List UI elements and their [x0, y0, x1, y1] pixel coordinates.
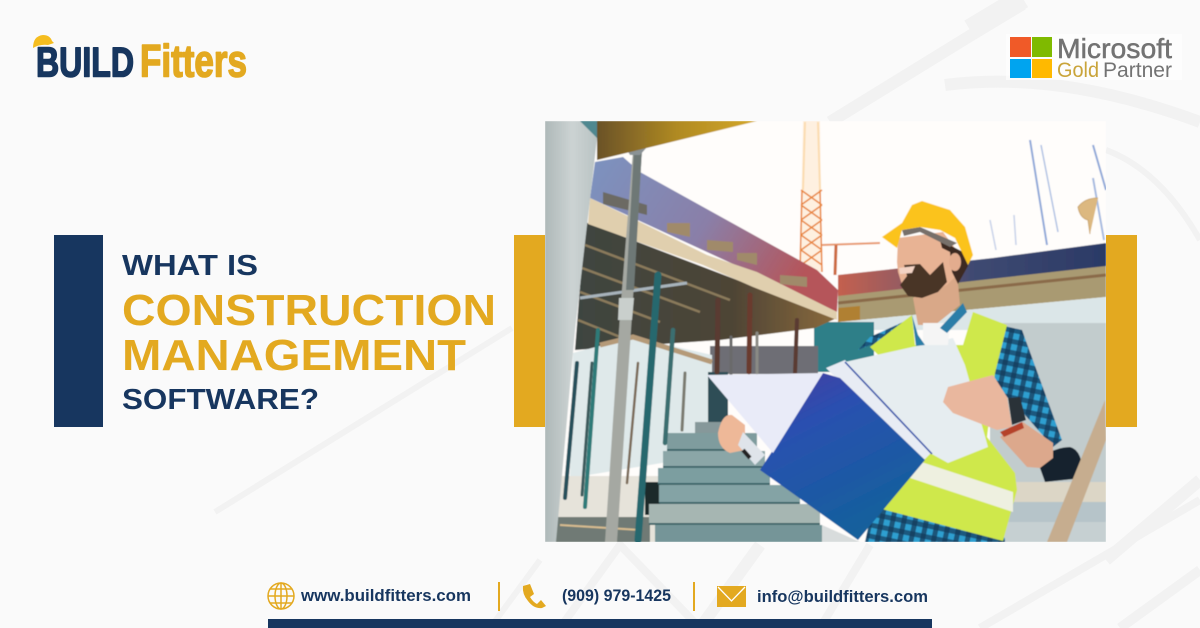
contact divider 1 — [498, 582, 500, 611]
contact divider 2 — [693, 582, 695, 611]
photo: construction engineer reading blueprints — [545, 121, 1106, 542]
logo: BuildFitters: BUILD — [36, 38, 134, 86]
logo: Microsoft Gold Partner: Partner — [1103, 59, 1172, 82]
navy accent bar — [54, 235, 103, 427]
left yellow accent bar — [514, 235, 545, 427]
neck — [913, 272, 960, 325]
contact: website — [268, 583, 471, 609]
hat band — [902, 227, 957, 247]
contact: website: www.buildfitters.com — [300, 586, 471, 605]
stairs — [649, 422, 860, 542]
shirt: shoulder, sleeve and hem — [858, 318, 1062, 542]
wooden plank — [1047, 400, 1106, 542]
hard hat — [882, 201, 973, 265]
paper sheets — [845, 338, 988, 463]
ear — [949, 253, 961, 271]
title — [122, 250, 496, 416]
right yellow accent bar — [1106, 235, 1137, 427]
far beam — [838, 266, 1106, 322]
left hand — [718, 415, 745, 453]
distant blue streaks and hanging load — [990, 140, 1106, 250]
concrete slab beam — [588, 198, 837, 320]
white tee — [923, 323, 950, 345]
title: SOFTWARE? — [122, 384, 319, 416]
contact: phone: (909) 979-1425 — [562, 586, 671, 605]
rubble blocks on beam — [603, 192, 807, 287]
contact: phone — [523, 584, 671, 608]
blue hex roof — [590, 157, 838, 312]
logo: Microsoft Gold Partner: Microsoft — [1057, 33, 1172, 64]
scaffolding poles — [565, 275, 797, 540]
yellow ceiling — [597, 121, 757, 160]
title: CONSTRUCTION — [122, 286, 496, 335]
main silver prop — [605, 145, 648, 542]
wrist watch — [1000, 397, 1026, 437]
mouth highlight — [899, 266, 915, 274]
right hand — [943, 375, 1012, 430]
grey concrete wall right — [990, 323, 1106, 488]
ground — [558, 476, 658, 542]
logo: BuildFitters — [33, 35, 247, 86]
concrete column — [545, 121, 599, 542]
distant pale background below beam — [838, 297, 1106, 330]
logo: Microsoft Gold Partner: Gold — [1057, 59, 1099, 82]
sky — [545, 121, 1106, 542]
shirt collar — [912, 303, 967, 346]
folder white spine — [826, 360, 932, 462]
footer navy bar — [268, 619, 932, 628]
back white wall — [570, 337, 712, 478]
far roof wall — [838, 243, 1106, 298]
left paper — [707, 373, 823, 453]
distant building in gap — [710, 346, 818, 374]
title: MANAGEMENT — [122, 331, 466, 380]
hair — [940, 240, 968, 284]
teal concrete behind man — [814, 322, 874, 372]
right forearm — [1000, 422, 1053, 468]
title: WHAT IS — [122, 250, 258, 282]
contact: email: info@buildfitters.com — [757, 587, 928, 606]
safety vest — [870, 312, 1017, 541]
grey bag and ground right — [995, 447, 1106, 542]
logo: Microsoft Gold Partner — [1006, 33, 1182, 82]
face — [896, 231, 954, 286]
vest reflective strip — [910, 462, 1014, 512]
beard — [900, 262, 947, 298]
underside of slab — [575, 222, 837, 350]
logo: BuildFitters: Fitters — [140, 36, 247, 86]
crane tower — [800, 121, 880, 275]
blue folder — [760, 373, 925, 540]
